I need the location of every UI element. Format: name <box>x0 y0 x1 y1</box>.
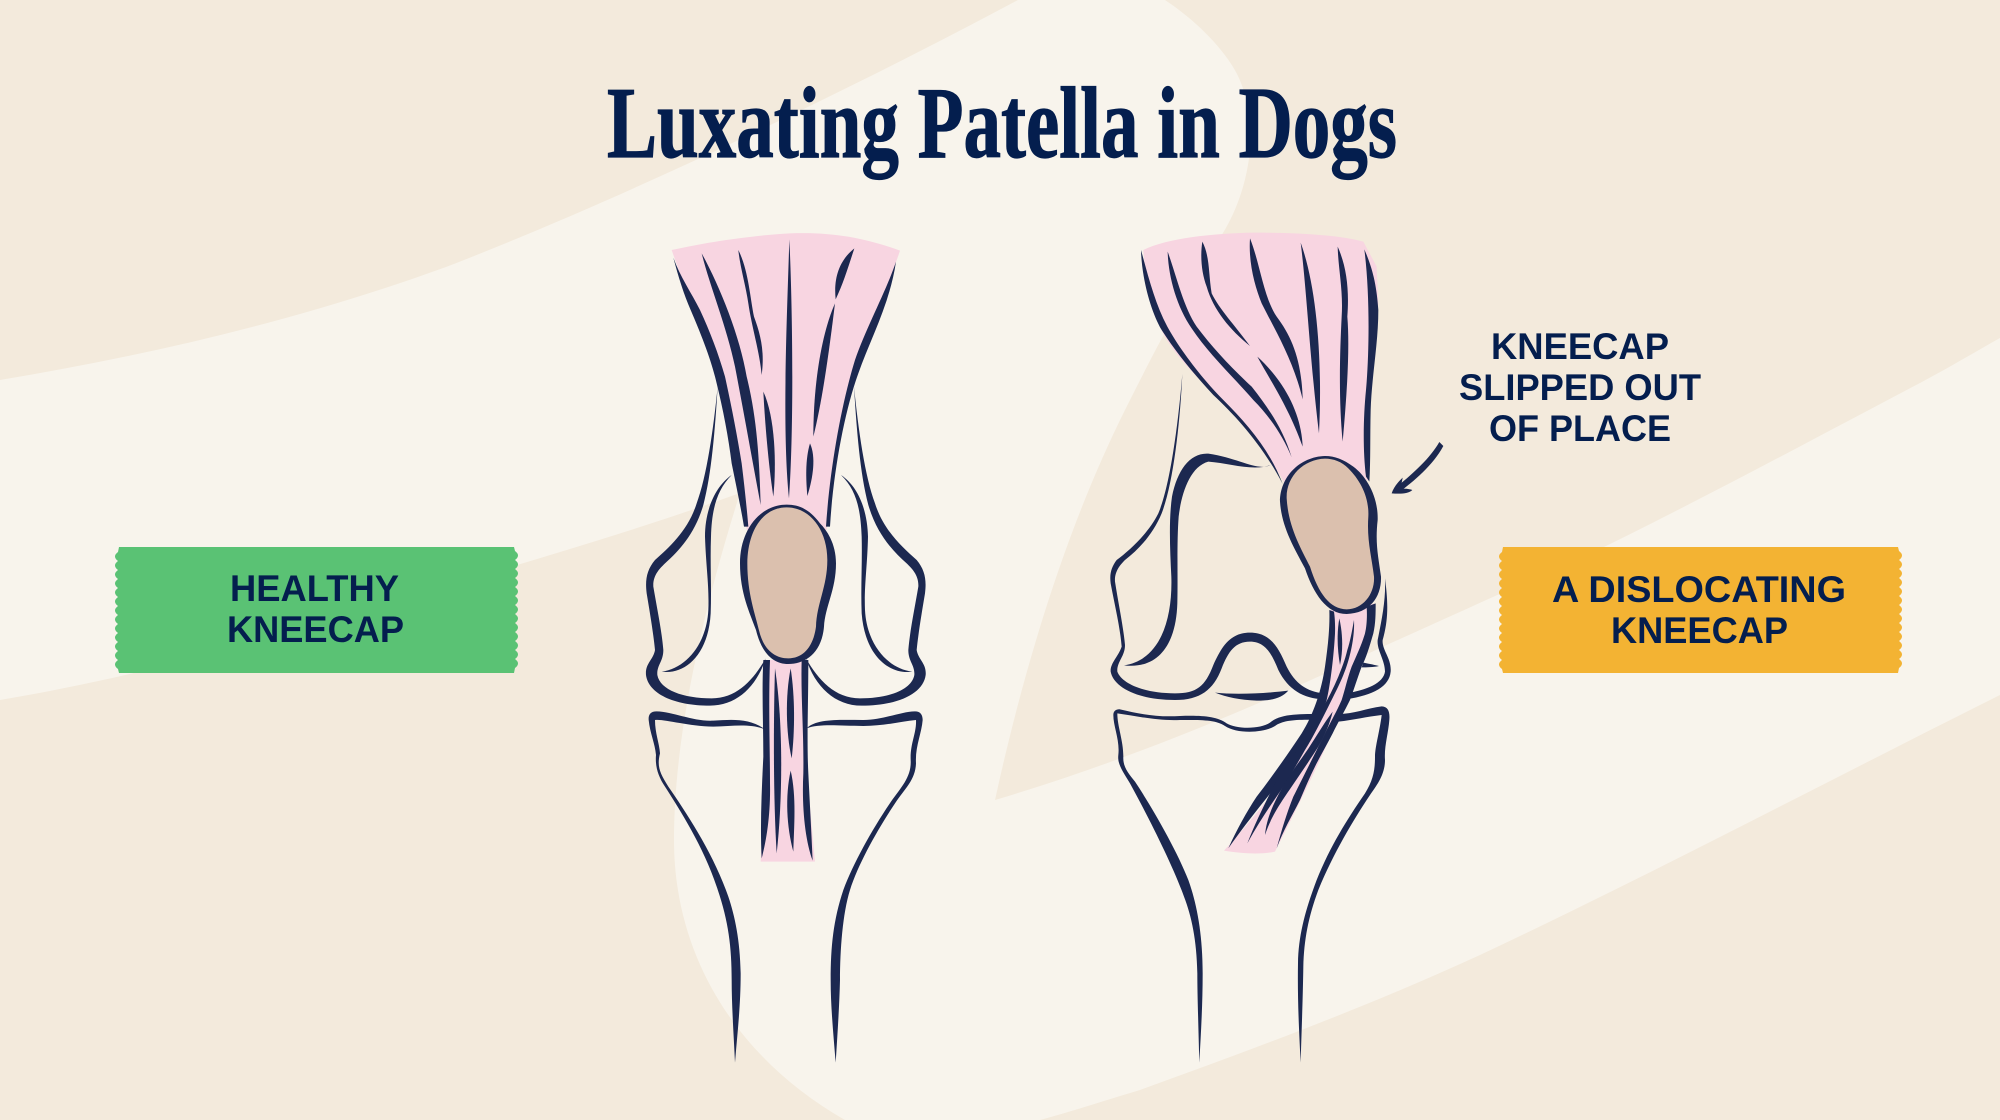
label: healthy kneecap: KNEECAP <box>227 609 404 650</box>
callout text: SLIPPED OUT <box>1459 367 1701 408</box>
kneecap, healthy knee <box>740 505 836 664</box>
title: Luxating Patella in Dogs <box>607 67 1397 180</box>
patellar tendon, healthy knee <box>761 660 815 862</box>
patellar tendon, dislocating knee <box>1224 603 1376 854</box>
femur, dislocating knee <box>1110 374 1391 700</box>
label: a dislocating kneecap <box>1499 547 1902 673</box>
callout text: OF PLACE <box>1489 408 1671 449</box>
diagram: healthy knee <box>646 233 926 1063</box>
quadriceps muscle, dislocating knee <box>1141 233 1378 487</box>
arrow: to dislocated kneecap <box>1392 442 1443 494</box>
label: healthy kneecap: HEALTHY <box>230 568 399 609</box>
quadriceps muscle, healthy knee <box>672 233 900 530</box>
tibia, healthy knee <box>649 711 923 1063</box>
diagram: dislocating knee <box>1110 233 1391 1063</box>
callout text: KNEECAP <box>1491 326 1669 367</box>
callout text <box>1459 326 1701 449</box>
label: a dislocating kneecap: A DISLOCATING <box>1552 569 1846 610</box>
femur, healthy knee <box>646 387 926 706</box>
label: healthy kneecap <box>115 547 518 673</box>
kneecap, dislocating knee <box>1280 456 1381 614</box>
label: a dislocating kneecap: KNEECAP <box>1611 610 1788 651</box>
tibia, dislocating knee <box>1113 691 1389 1063</box>
